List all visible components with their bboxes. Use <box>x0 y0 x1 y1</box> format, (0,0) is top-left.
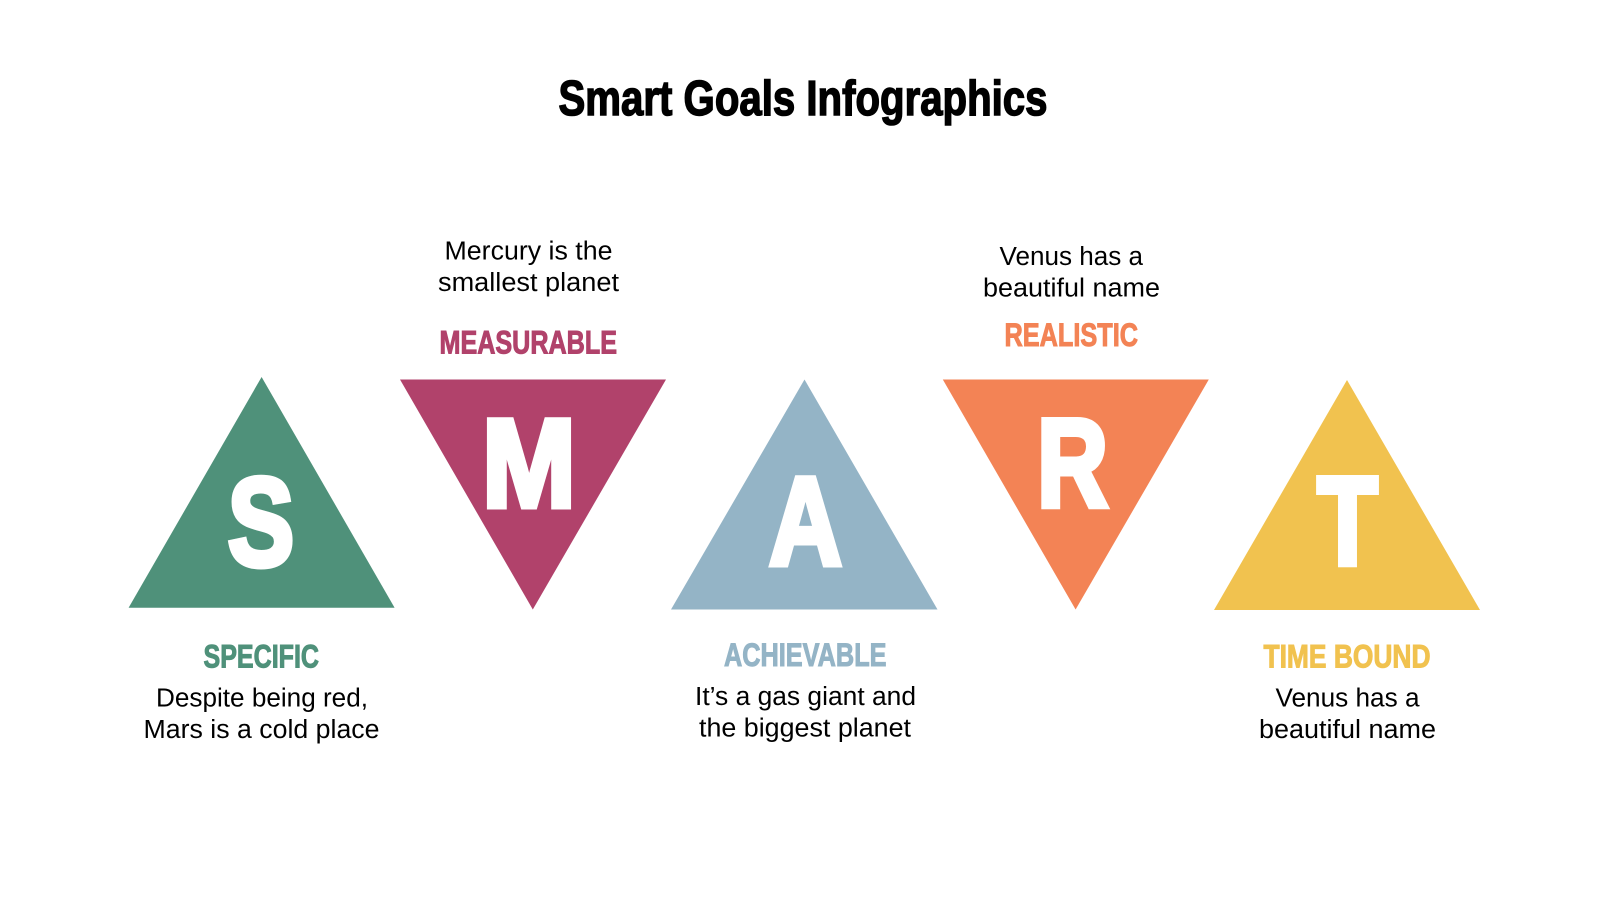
text: realistic description: beautiful name <box>983 274 1160 302</box>
letter S: S <box>228 453 294 592</box>
text: achievable description <box>695 683 916 742</box>
triangle: T <box>1214 380 1480 610</box>
title: Smart Goals Infographics <box>558 71 1048 126</box>
panel: realistic <box>943 243 1209 610</box>
panel: time bound <box>1214 380 1480 744</box>
panel: measurable <box>400 238 666 610</box>
text: measurable description: smallest planet <box>438 269 619 297</box>
letter M: M <box>482 394 576 534</box>
text: achievable description: It’s a gas giant and <box>695 683 916 711</box>
text: realistic description <box>983 243 1160 302</box>
letter A: A <box>769 452 842 592</box>
heading: realistic: REALISTIC <box>1004 317 1138 353</box>
heading: specific: SPECIFIC <box>204 638 319 674</box>
text: time bound description: beautiful name <box>1259 716 1436 744</box>
text: time bound description <box>1259 684 1436 744</box>
letter R: R <box>1037 393 1108 533</box>
triangle: S <box>129 377 395 608</box>
heading: measurable: MEASURABLE <box>440 324 617 360</box>
heading: time bound: TIME BOUND <box>1264 638 1430 674</box>
triangle: R <box>943 380 1209 610</box>
triangle: M <box>400 380 666 610</box>
heading: achievable: ACHIEVABLE <box>724 637 886 673</box>
panel: achievable <box>671 380 938 742</box>
panel: specific <box>129 377 395 744</box>
triangle: A <box>671 380 938 610</box>
text: specific description <box>144 684 380 744</box>
text: measurable description: Mercury is the <box>444 238 612 266</box>
text: realistic description: Venus has a <box>1000 243 1144 271</box>
text: measurable description <box>438 238 619 297</box>
text: time bound description: Venus has a <box>1276 684 1420 712</box>
text: specific description: Mars is a cold place <box>144 716 380 744</box>
text: specific description: Despite being red, <box>156 684 368 712</box>
text: achievable description: the biggest planet <box>699 714 911 742</box>
letter T: T <box>1317 451 1378 591</box>
